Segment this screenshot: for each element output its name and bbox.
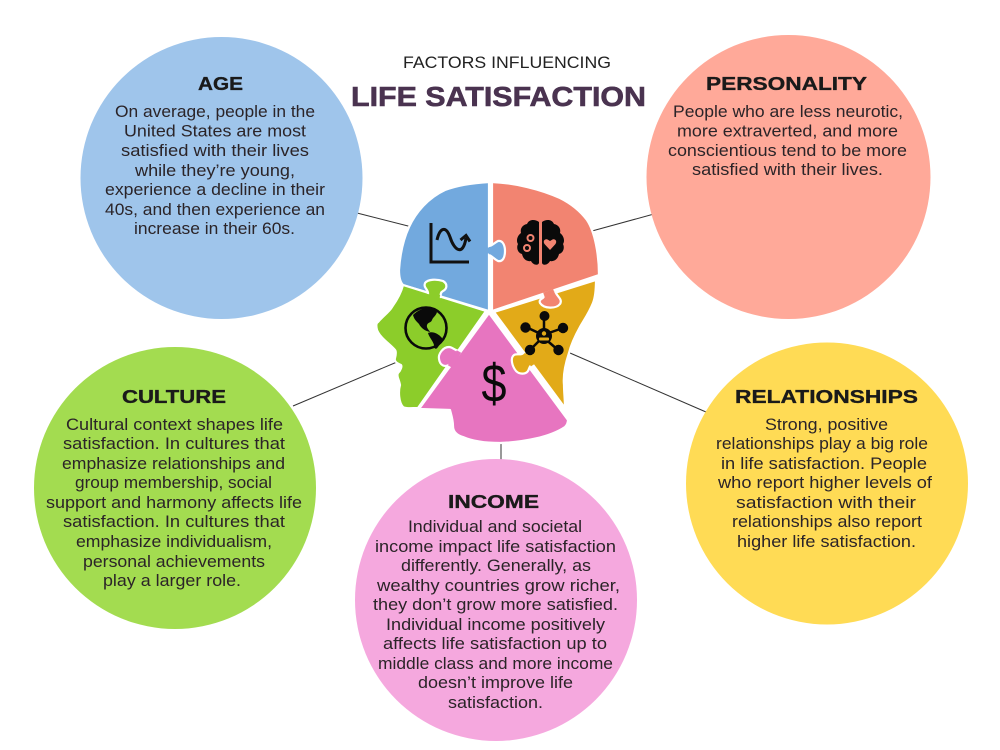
text: culture description: personal achievements	[83, 553, 265, 571]
icon: network	[520, 311, 568, 355]
text: income description: wealthy countries grow richer,	[376, 577, 620, 595]
text: income description: affects life satisfaction up to	[383, 635, 607, 653]
puzzle piece: salmon	[492, 182, 599, 311]
text: income description: they don’t grow more satisfied.	[373, 596, 618, 614]
panel: personality	[646, 35, 930, 319]
puzzle piece: pink	[419, 313, 568, 443]
puzzle tab: salmon	[540, 291, 561, 308]
text: relationships description: satisfaction with their	[736, 494, 917, 512]
heading: income: INCOME	[448, 491, 539, 512]
text: relationships description: in life satisfaction. People	[721, 455, 927, 473]
heading: age: AGE	[198, 73, 243, 94]
text: age description	[105, 103, 326, 238]
text: personality description	[668, 103, 907, 179]
title: LIFE SATISFACTION	[351, 81, 646, 112]
text: personality description: more extraverted, and more	[677, 122, 898, 140]
text: age description: while they’re young,	[134, 162, 295, 180]
text: culture description: support and harmony affects life	[46, 494, 302, 512]
icon: line chart	[431, 223, 470, 262]
text: culture description: satisfaction. In cultures that	[63, 513, 285, 531]
puzzle piece: gold	[494, 280, 596, 408]
icon: brain	[517, 220, 564, 265]
title: FACTORS INFLUENCING	[403, 53, 611, 72]
text: culture description: Cultural context shapes life	[66, 416, 283, 434]
panel: relationships	[686, 342, 968, 624]
text: culture description: play a larger role.	[103, 572, 241, 590]
text: age description: increase in their 60s.	[134, 220, 295, 238]
puzzle piece: blue	[399, 182, 489, 311]
text: culture description: emphasize relationships and	[62, 455, 285, 473]
text: relationships description: who report higher levels of	[717, 474, 932, 492]
text: income description: doesn’t improve life	[418, 674, 573, 692]
text: culture description	[46, 416, 302, 590]
puzzle piece: green	[376, 285, 486, 408]
text: age description: satisfied with their lives	[121, 142, 309, 160]
text: age description: On average, people in the	[115, 103, 315, 121]
text: income description: Individual income positively	[386, 616, 606, 634]
text: personality description: conscientious tend to be more	[668, 142, 907, 160]
text: age description: experience a decline in their	[105, 181, 326, 199]
panel: culture	[34, 347, 316, 629]
text: income description: Individual and societal	[408, 518, 582, 536]
text: income description: income impact life satisfaction	[375, 538, 616, 556]
text: relationships description	[716, 416, 932, 551]
text: relationships description: higher life satisfaction.	[737, 533, 916, 551]
icon: globe	[406, 308, 446, 349]
puzzle tab: pink	[439, 347, 460, 368]
head puzzle	[376, 182, 599, 443]
heading: culture: CULTURE	[122, 386, 226, 407]
text: culture description: satisfaction. In cultures that	[63, 435, 285, 453]
text: age description: United States are most	[124, 122, 306, 140]
text: culture description: group membership, social	[75, 474, 272, 492]
text: relationships description: Strong, positive	[765, 416, 888, 434]
text: income description: satisfaction.	[448, 694, 543, 712]
heading: relationships: RELATIONSHIPS	[735, 386, 918, 407]
heading: personality: PERSONALITY	[706, 73, 868, 94]
text: personality description: People who are less neurotic,	[673, 103, 903, 121]
text: age description: 40s, and then experience an	[105, 201, 325, 219]
text: income description	[373, 518, 620, 712]
text: income description: middle class and more income	[378, 655, 613, 673]
text: relationships description: relationships play a big role	[716, 435, 928, 453]
text: income description: differently. Generally, as	[401, 557, 591, 575]
text: relationships description: relationships also report	[732, 513, 922, 531]
panel: age	[80, 37, 362, 319]
text: culture description: emphasize individualism,	[76, 533, 272, 551]
text: personality description: satisfied with their lives.	[692, 161, 883, 179]
panel: income	[355, 459, 637, 741]
title	[351, 53, 646, 112]
puzzle tab: gold	[512, 352, 534, 374]
icon: dollar sign: $	[482, 354, 506, 414]
puzzle tab: green	[425, 280, 446, 298]
puzzle tab: blue	[489, 241, 505, 261]
